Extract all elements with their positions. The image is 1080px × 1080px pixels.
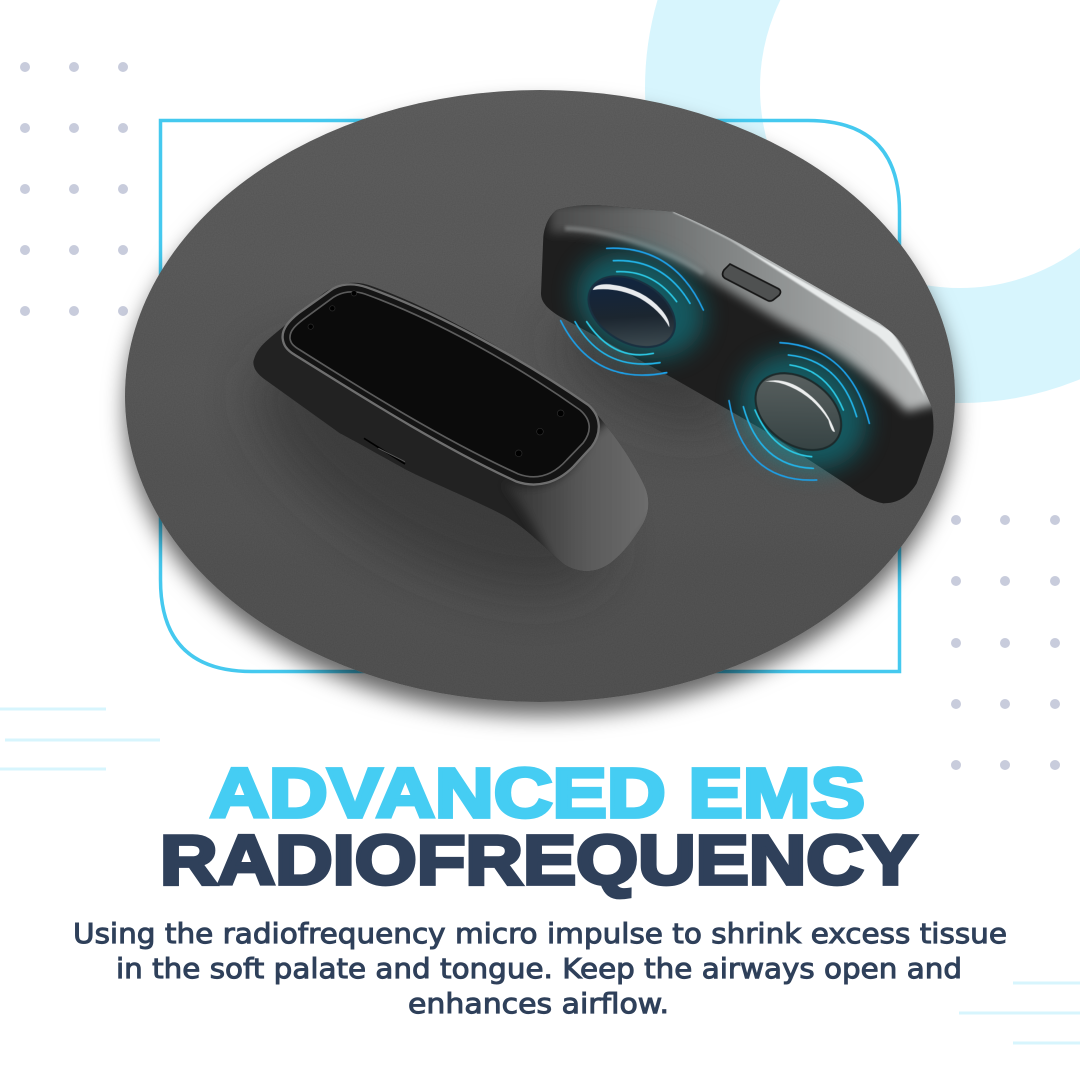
case body — [253, 283, 648, 571]
title: radiofrequency: RADIOFREQUENCY — [160, 821, 917, 899]
soft shadow under devices — [219, 289, 755, 641]
body copy: Using the radiofrequency micro impulse to shrink excess tissue — [73, 917, 1007, 950]
dot grid: right — [951, 515, 1060, 770]
body copy — [73, 917, 1007, 1020]
upper light band — [550, 203, 940, 412]
speed lines: right — [959, 983, 1080, 1043]
speed lines: left — [0, 709, 160, 769]
charging slot — [364, 438, 405, 464]
electrode 2 — [741, 357, 856, 466]
device: closed case with black top panel — [253, 283, 667, 587]
title: advanced EMS: ADVANCED EMS — [210, 754, 865, 832]
body copy: enhances airflow. — [408, 987, 669, 1020]
electrode 1 — [576, 262, 687, 362]
sensor dots — [308, 291, 564, 457]
cyan rounded frame — [160, 120, 900, 672]
panel outer ring — [283, 284, 599, 485]
device: open unit with two glowing electrodes — [541, 203, 940, 503]
panel inner ring — [290, 292, 589, 477]
case bevel highlight — [510, 420, 648, 571]
dot grid: left — [20, 62, 128, 316]
grey product disc — [125, 90, 955, 702]
disc grain — [125, 90, 955, 702]
decorative ring: top right — [702, 0, 1080, 346]
teal glow — [558, 232, 889, 494]
waves — [561, 248, 869, 480]
button — [723, 264, 781, 301]
unit body — [541, 205, 933, 503]
body copy: in the soft palate and tongue. Keep the airways open and — [116, 952, 962, 985]
